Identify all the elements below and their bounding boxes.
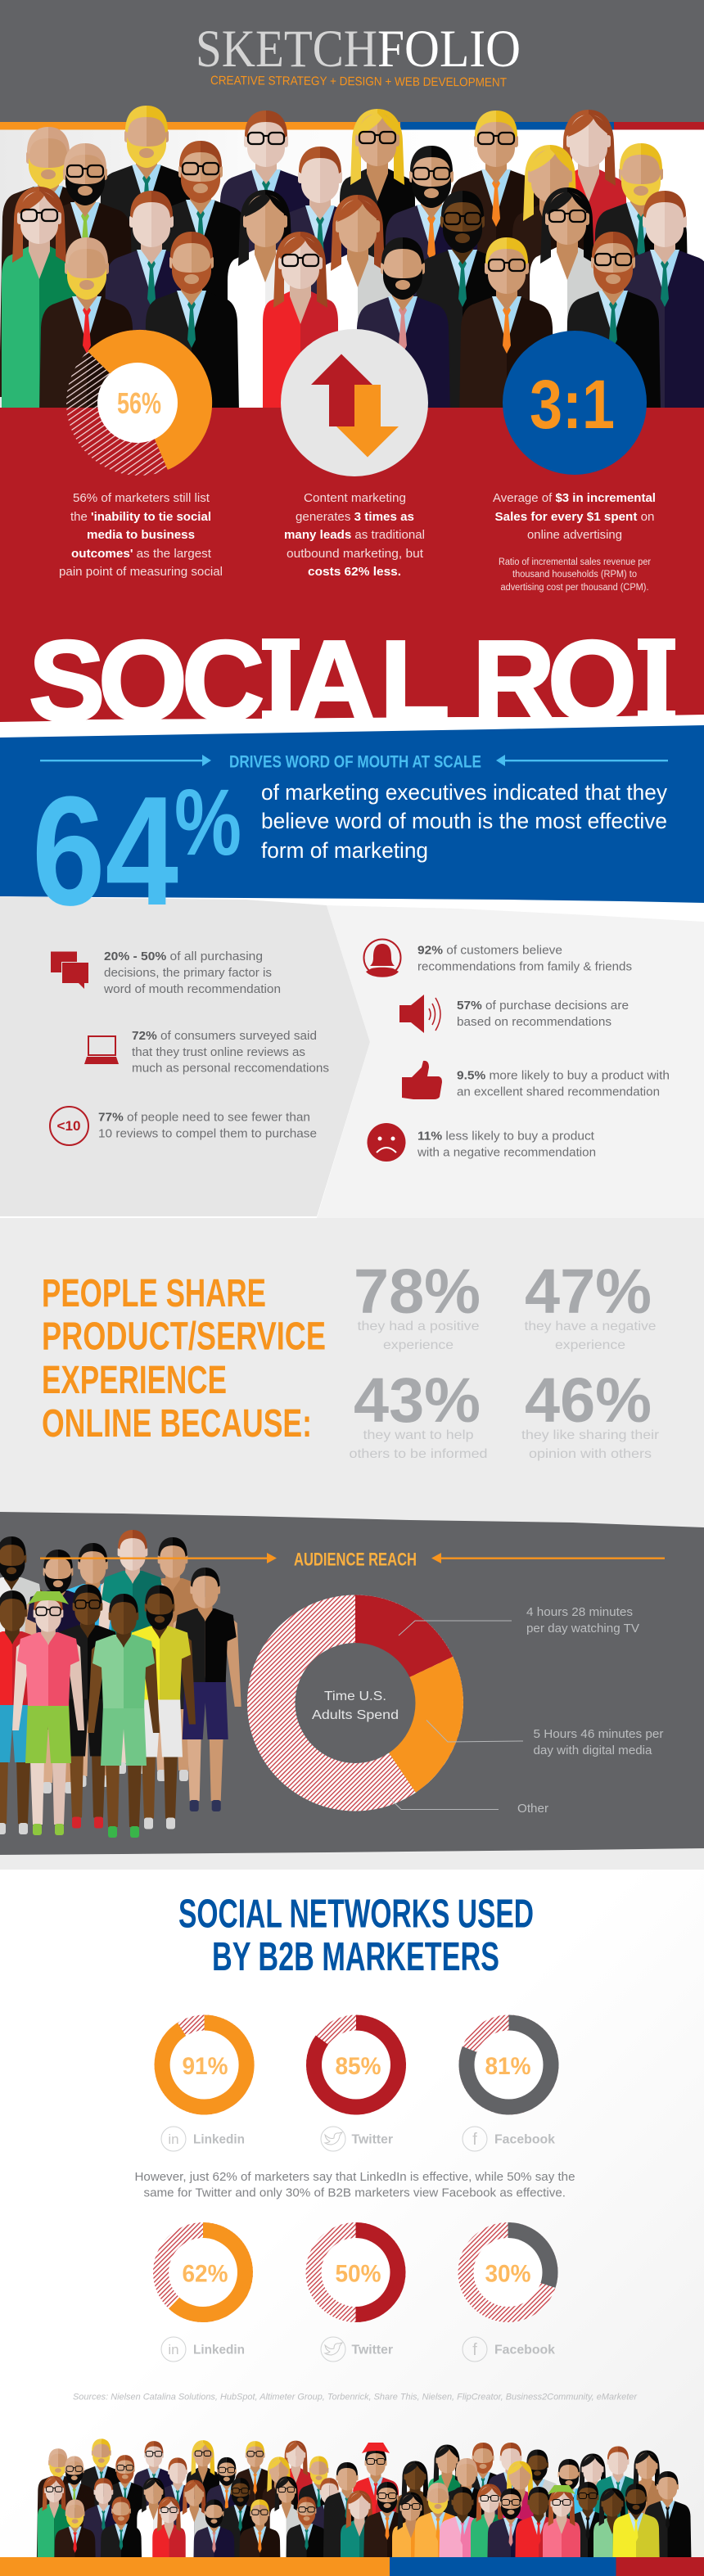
text block: 72% xyxy=(132,1029,329,1076)
heading: social networks: SOCIAL NETWORKS USED xyxy=(178,1893,534,1937)
heading: social networks xyxy=(178,1893,534,1979)
text block: 20-50% xyxy=(103,950,281,996)
text block: content marketing: costs 62% less. xyxy=(308,565,401,579)
text block: 11% xyxy=(417,1130,596,1159)
text block: 56% of marketers: media to business xyxy=(87,528,195,542)
text block: 9.5%: 9.5% more likely to buy a product with xyxy=(457,1069,670,1082)
panel: left grey arrow shape xyxy=(0,896,370,1216)
text block: 92%: recommendations from family & friends xyxy=(417,959,632,974)
text block: 77%: 77% of people need to see fewer than xyxy=(98,1110,310,1125)
label: Twitter effective: Twitter xyxy=(352,2343,393,2357)
panel: blue word of mouth xyxy=(0,725,704,903)
chart: 56% donut xyxy=(66,330,212,476)
text block: 56% of marketers: outcomes' as the largest xyxy=(71,547,212,561)
label: digital media: day with digital media xyxy=(534,1744,652,1757)
text block: average of $3: Sales for every $1 spent on xyxy=(494,510,655,524)
text block: average of $3: online advertising xyxy=(527,528,622,542)
stat: 43%: they want to help xyxy=(363,1428,474,1442)
logo: Sketchfolio: SKETCH xyxy=(196,20,377,79)
text block: 57%: based on recommendations xyxy=(457,1015,611,1029)
illustration: group of casual people xyxy=(0,1530,241,1838)
label: digital media: 5 Hours 46 minutes per xyxy=(534,1727,663,1741)
text block: 77% xyxy=(98,1110,317,1141)
text block: average of $3: Average of $3 in incremental xyxy=(493,491,656,505)
panel: red ROI stats xyxy=(0,408,704,729)
chart: time US adults spend donut: Time U.S. xyxy=(324,1690,386,1703)
heading: social networks: BY B2B MARKETERS xyxy=(212,1935,499,1979)
text block: 57% xyxy=(457,999,629,1029)
label: Linkedin effective xyxy=(161,2337,245,2362)
arrow: heading right xyxy=(496,755,668,766)
text block: average of $3: thousand households (RPM) to xyxy=(512,570,637,580)
arrow: heading left xyxy=(40,755,211,766)
text block: 9.5%: an excellent shared recommendation xyxy=(457,1085,660,1099)
text block: marketing executives: of marketing executives indicated that they xyxy=(261,780,667,805)
text block: 20-50%: word of mouth recommendation xyxy=(103,982,281,996)
icon: thumbs up xyxy=(402,1061,442,1099)
text block: 56% of marketers: 56% of marketers still list xyxy=(73,491,210,505)
label: watching TV: per day watching TV xyxy=(526,1622,639,1635)
stat: 43%: 43% xyxy=(354,1365,481,1436)
arrow: audience right xyxy=(431,1553,665,1563)
arrow: audience left xyxy=(40,1553,277,1563)
text block: marketing executives xyxy=(261,780,667,863)
label: Facebook: Facebook xyxy=(494,2133,555,2146)
panel: people share xyxy=(0,1218,704,1873)
text block: 57%: 57% of purchase decisions are xyxy=(457,999,629,1013)
text block: 72%: much as personal reccomendations xyxy=(132,1061,329,1076)
icon: fewer than 10: <10 xyxy=(57,1118,80,1134)
heading: audience reach: AUDIENCE REACH xyxy=(294,1549,417,1570)
stat: 43%: others to be informed xyxy=(349,1447,488,1461)
heading: drives word of mouth: DRIVES WORD OF MOUTH AT SCALE xyxy=(229,753,481,771)
label: Facebook: f xyxy=(472,2131,477,2149)
text block: average of $3 xyxy=(493,491,656,593)
text block: content marketing: outbound marketing, but xyxy=(287,547,424,561)
chart: time US adults spend donut: Adults Spend xyxy=(312,1708,399,1722)
chart: Facebook 30% xyxy=(458,2222,558,2322)
footer stripe xyxy=(0,2557,704,2576)
stat: 64 percent: % xyxy=(174,770,241,875)
text block: marketing executives: believe word of mouth is the most effective xyxy=(261,809,667,833)
chart: Facebook 30%: 30% xyxy=(485,2261,530,2287)
heading: people share: ONLINE BECAUSE: xyxy=(42,1402,312,1446)
text block: content marketing: Content marketing xyxy=(304,491,406,505)
label: watching TV: 4 hours 28 minutes xyxy=(526,1605,633,1619)
text block: however xyxy=(134,2171,575,2200)
label: Twitter xyxy=(321,2127,393,2151)
logo: Sketchfolio xyxy=(196,20,521,79)
text block: 9.5% xyxy=(457,1069,670,1099)
text block: average of $3: Ratio of incremental sales revenue per xyxy=(499,557,651,567)
chart: Linkedin 62%: 62% xyxy=(182,2261,228,2287)
panel: audience reach xyxy=(0,1512,704,1855)
stat: 78%: they had a positive xyxy=(357,1320,480,1333)
chart: Linkedin 91%: 91% xyxy=(182,2053,228,2080)
panel: right light grey xyxy=(317,905,704,1218)
text block: content marketing xyxy=(284,491,425,579)
text block: 56% of marketers: the 'inability to tie social xyxy=(70,510,211,524)
chart: Twitter 85%: 85% xyxy=(336,2053,381,2080)
chart: 3:1 ratio badge xyxy=(503,331,647,475)
label: Linkedin effective: Linkedin xyxy=(193,2343,245,2357)
text block: sources: Sources: Nielsen Catalina Solutions, HubSpot, Altimeter Group, Torbenrick, Share This, Nielsen, FlipCreator, Business2Community, eMarketer xyxy=(73,2392,638,2402)
icon: up and down arrows xyxy=(281,329,428,476)
label: Twitter: Twitter xyxy=(352,2133,393,2146)
text block: 56% of marketers: pain point of measuring social xyxy=(59,565,223,579)
label: Facebook effective xyxy=(463,2337,555,2362)
heading: people share: PEOPLE SHARE xyxy=(42,1272,266,1315)
stat: 78%: 78% xyxy=(354,1256,481,1327)
label: Facebook effective: Facebook xyxy=(494,2343,555,2357)
text block: content marketing: generates 3 times as xyxy=(296,510,414,524)
label: Twitter effective xyxy=(321,2337,393,2362)
stat: 46%: 46% xyxy=(525,1365,652,1436)
tagline: CREATIVE STRATEGY + DESIGN + WEB DEVELOPMENT xyxy=(210,74,507,90)
label: Linkedin: in xyxy=(168,2132,179,2147)
icon: speaker xyxy=(399,995,440,1033)
text block: 92%: 92% of customers believe xyxy=(417,943,562,958)
label: watching TV xyxy=(526,1605,639,1635)
stat: 64 percent: 64 xyxy=(32,765,178,938)
heading: people share xyxy=(42,1272,326,1446)
chart: Facebook 81%: 81% xyxy=(485,2053,530,2080)
heading: people share: EXPERIENCE xyxy=(42,1359,227,1402)
chart: Twitter 50%: 50% xyxy=(336,2261,381,2287)
panel: white brush divider xyxy=(0,715,704,738)
chart: time US adults spend donut xyxy=(247,1595,523,1811)
stat: 46% xyxy=(521,1365,660,1461)
icon: speech bubbles xyxy=(51,951,89,989)
stat: 43% xyxy=(349,1365,488,1461)
text block: 11%: 11% less likely to buy a product xyxy=(417,1130,595,1143)
heading: people share: PRODUCT/SERVICE xyxy=(42,1315,326,1359)
text block: 20-50%: 20% - 50% of all purchasing xyxy=(104,950,263,963)
text block: 77%: 10 reviews to compel them to purchase xyxy=(98,1126,317,1141)
text block: however: same for Twitter and only 30% of B2B marketers view Facebook as effective. xyxy=(144,2187,566,2200)
text block: average of $3: advertising cost per thousand (CPM). xyxy=(501,583,648,593)
label: Linkedin: Linkedin xyxy=(193,2133,245,2146)
chart: Linkedin 91% xyxy=(155,2015,255,2115)
text block: 20-50%: decisions, the primary factor is xyxy=(104,966,272,980)
stat: 46%: they like sharing their xyxy=(521,1428,660,1442)
logo: Sketchfolio: FOLIO xyxy=(377,20,521,79)
text block: 11%: with a negative recommendation xyxy=(417,1146,596,1159)
header band xyxy=(0,0,704,408)
chart: Linkedin 62% xyxy=(153,2222,253,2322)
icon: laptop xyxy=(84,1036,119,1064)
stat: 78%: experience xyxy=(383,1338,454,1352)
label: Facebook effective: f xyxy=(472,2341,477,2359)
chart: Twitter 85% xyxy=(306,2014,406,2115)
illustration: full crowd at footer xyxy=(36,2438,691,2557)
text block: 72%: 72% of consumers surveyed said xyxy=(132,1029,317,1043)
text block: 56% of marketers xyxy=(59,491,223,579)
stat: 47%: 47% xyxy=(525,1256,652,1327)
text block: however: However, just 62% of marketers say that LinkedIn is effective, while 50% say the xyxy=(134,2171,575,2184)
text block: content marketing: many leads as traditional xyxy=(284,528,425,542)
chart: Twitter 50% xyxy=(306,2222,406,2322)
text block: 92% xyxy=(417,943,632,974)
chart: 56% donut: 56% xyxy=(117,386,161,420)
text block: 72%: that they trust online reviews as xyxy=(132,1045,305,1059)
label: digital media xyxy=(534,1727,663,1757)
stat: 47%: they have a negative xyxy=(524,1320,657,1333)
panel: social networks xyxy=(0,1870,704,2576)
chart: Facebook 81% xyxy=(458,2015,558,2115)
text block: marketing executives: form of marketing xyxy=(261,838,428,863)
stat: 47%: experience xyxy=(555,1338,625,1352)
label: Facebook xyxy=(463,2127,555,2151)
label: Linkedin xyxy=(161,2127,245,2151)
icon: fewer than 10 xyxy=(50,1107,88,1145)
stat: 46%: opinion with others xyxy=(529,1447,652,1461)
icon: woman xyxy=(363,940,401,977)
label: Linkedin effective: in xyxy=(168,2342,179,2357)
label: other: Other xyxy=(517,1802,548,1816)
chart: 3:1 ratio badge: 3:1 xyxy=(530,366,615,443)
illustration: crowd of business people xyxy=(0,106,704,508)
icon: sad face xyxy=(367,1123,406,1162)
heading: Social ROI: SOCIAL ROI xyxy=(29,616,673,745)
